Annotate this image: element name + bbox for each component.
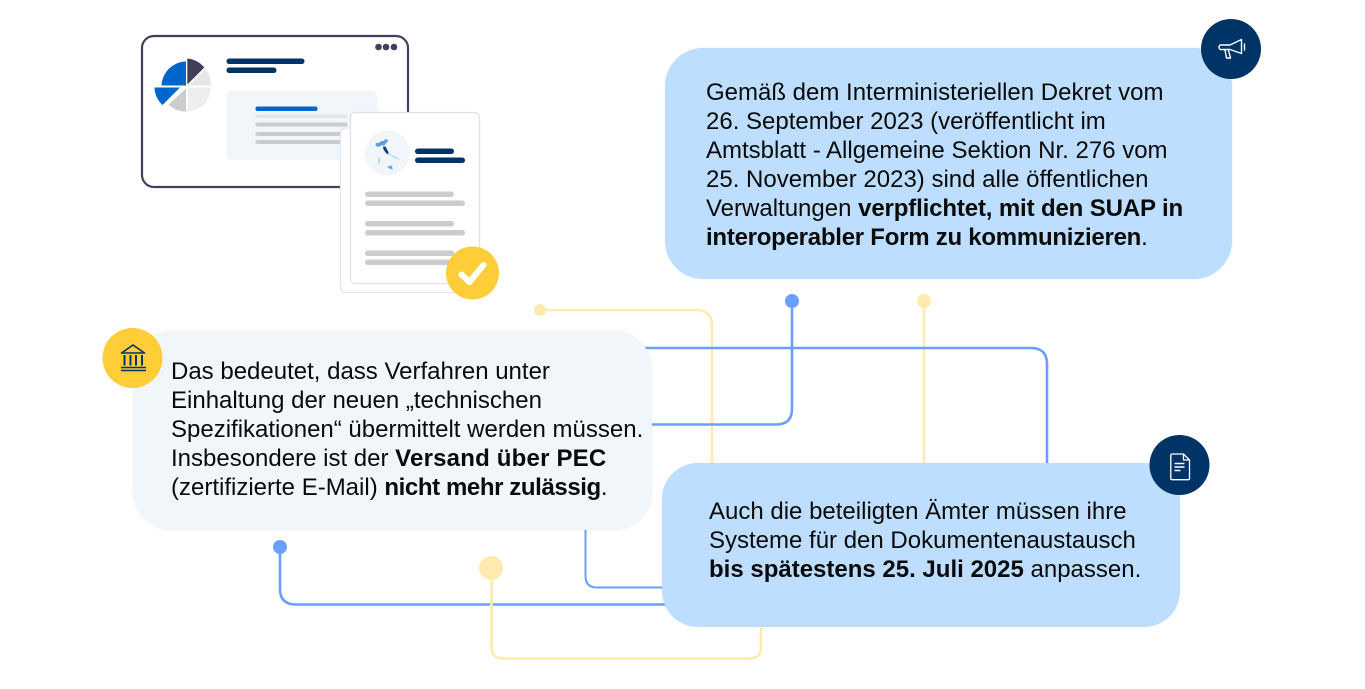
panel: left note <box>133 331 652 530</box>
text: left note <box>171 358 643 501</box>
yellow connector: top dot to lower right bubble <box>917 294 931 470</box>
browser window <box>142 36 408 187</box>
text: decree note: Verwaltungen verpflichtet, mit den SUAP in <box>706 195 1183 222</box>
icon: megaphone <box>1201 19 1261 79</box>
inner card <box>226 91 378 160</box>
text: decree note: interoperabler Form zu kommunizieren. <box>706 224 1148 251</box>
text: left note: Insbesondere ist der Versand über PEC <box>171 445 606 472</box>
text: left note: Einhaltung der neuen „technischen <box>171 387 542 414</box>
heading bars <box>226 58 304 73</box>
pie chart <box>154 58 211 112</box>
text: decree note: Amtsblatt - Allgemeine Sektion Nr. 276 vom <box>706 137 1168 164</box>
yellow connector: left dot to lower right bubble <box>534 304 712 470</box>
text lines <box>365 192 465 265</box>
blue connector: lower dot to lower right bubble <box>273 540 670 604</box>
blue connector: top dot to left bubble <box>640 294 799 424</box>
blue connector: left bubble to lower right bubble top <box>630 348 1047 470</box>
text: deadline note: Systeme für den Dokumentenaustausch <box>709 527 1136 554</box>
window dots <box>375 44 397 50</box>
map of Italy icon <box>365 130 410 176</box>
icon: institution building <box>102 328 162 388</box>
text: left note: (zertifizierte E-Mail) nicht mehr zulässig. <box>171 474 607 501</box>
back document sheet <box>340 128 470 292</box>
icon: document <box>1150 435 1210 495</box>
panel: top right note <box>665 48 1232 279</box>
heading bars <box>415 148 465 163</box>
text: left note: Spezifikationen“ übermittelt werden müssen. <box>171 416 643 443</box>
text: decree note: 25. November 2023) sind alle öffentlichen <box>706 166 1148 193</box>
text: decree note <box>706 79 1183 251</box>
yellow connector: large dot to lower right bubble bottom <box>479 556 761 658</box>
text: left note: Das bedeutet, dass Verfahren unter <box>171 358 550 385</box>
text: decree note: Gemäß dem Interministeriellen Dekret vom <box>706 79 1163 106</box>
text: deadline note: Auch die beteiligten Ämter müssen ihre <box>709 498 1127 525</box>
front document sheet <box>350 112 480 284</box>
text: deadline note: bis spätestens 25. Juli 2025 anpassen. <box>709 556 1141 583</box>
text: decree note: 26. September 2023 (veröffentlicht im <box>706 108 1106 135</box>
yellow check badge <box>446 246 499 300</box>
text: deadline note <box>709 498 1141 583</box>
blue connector: left bubble bottom to lower right bubble <box>586 520 670 588</box>
panel: lower right note <box>662 463 1180 627</box>
